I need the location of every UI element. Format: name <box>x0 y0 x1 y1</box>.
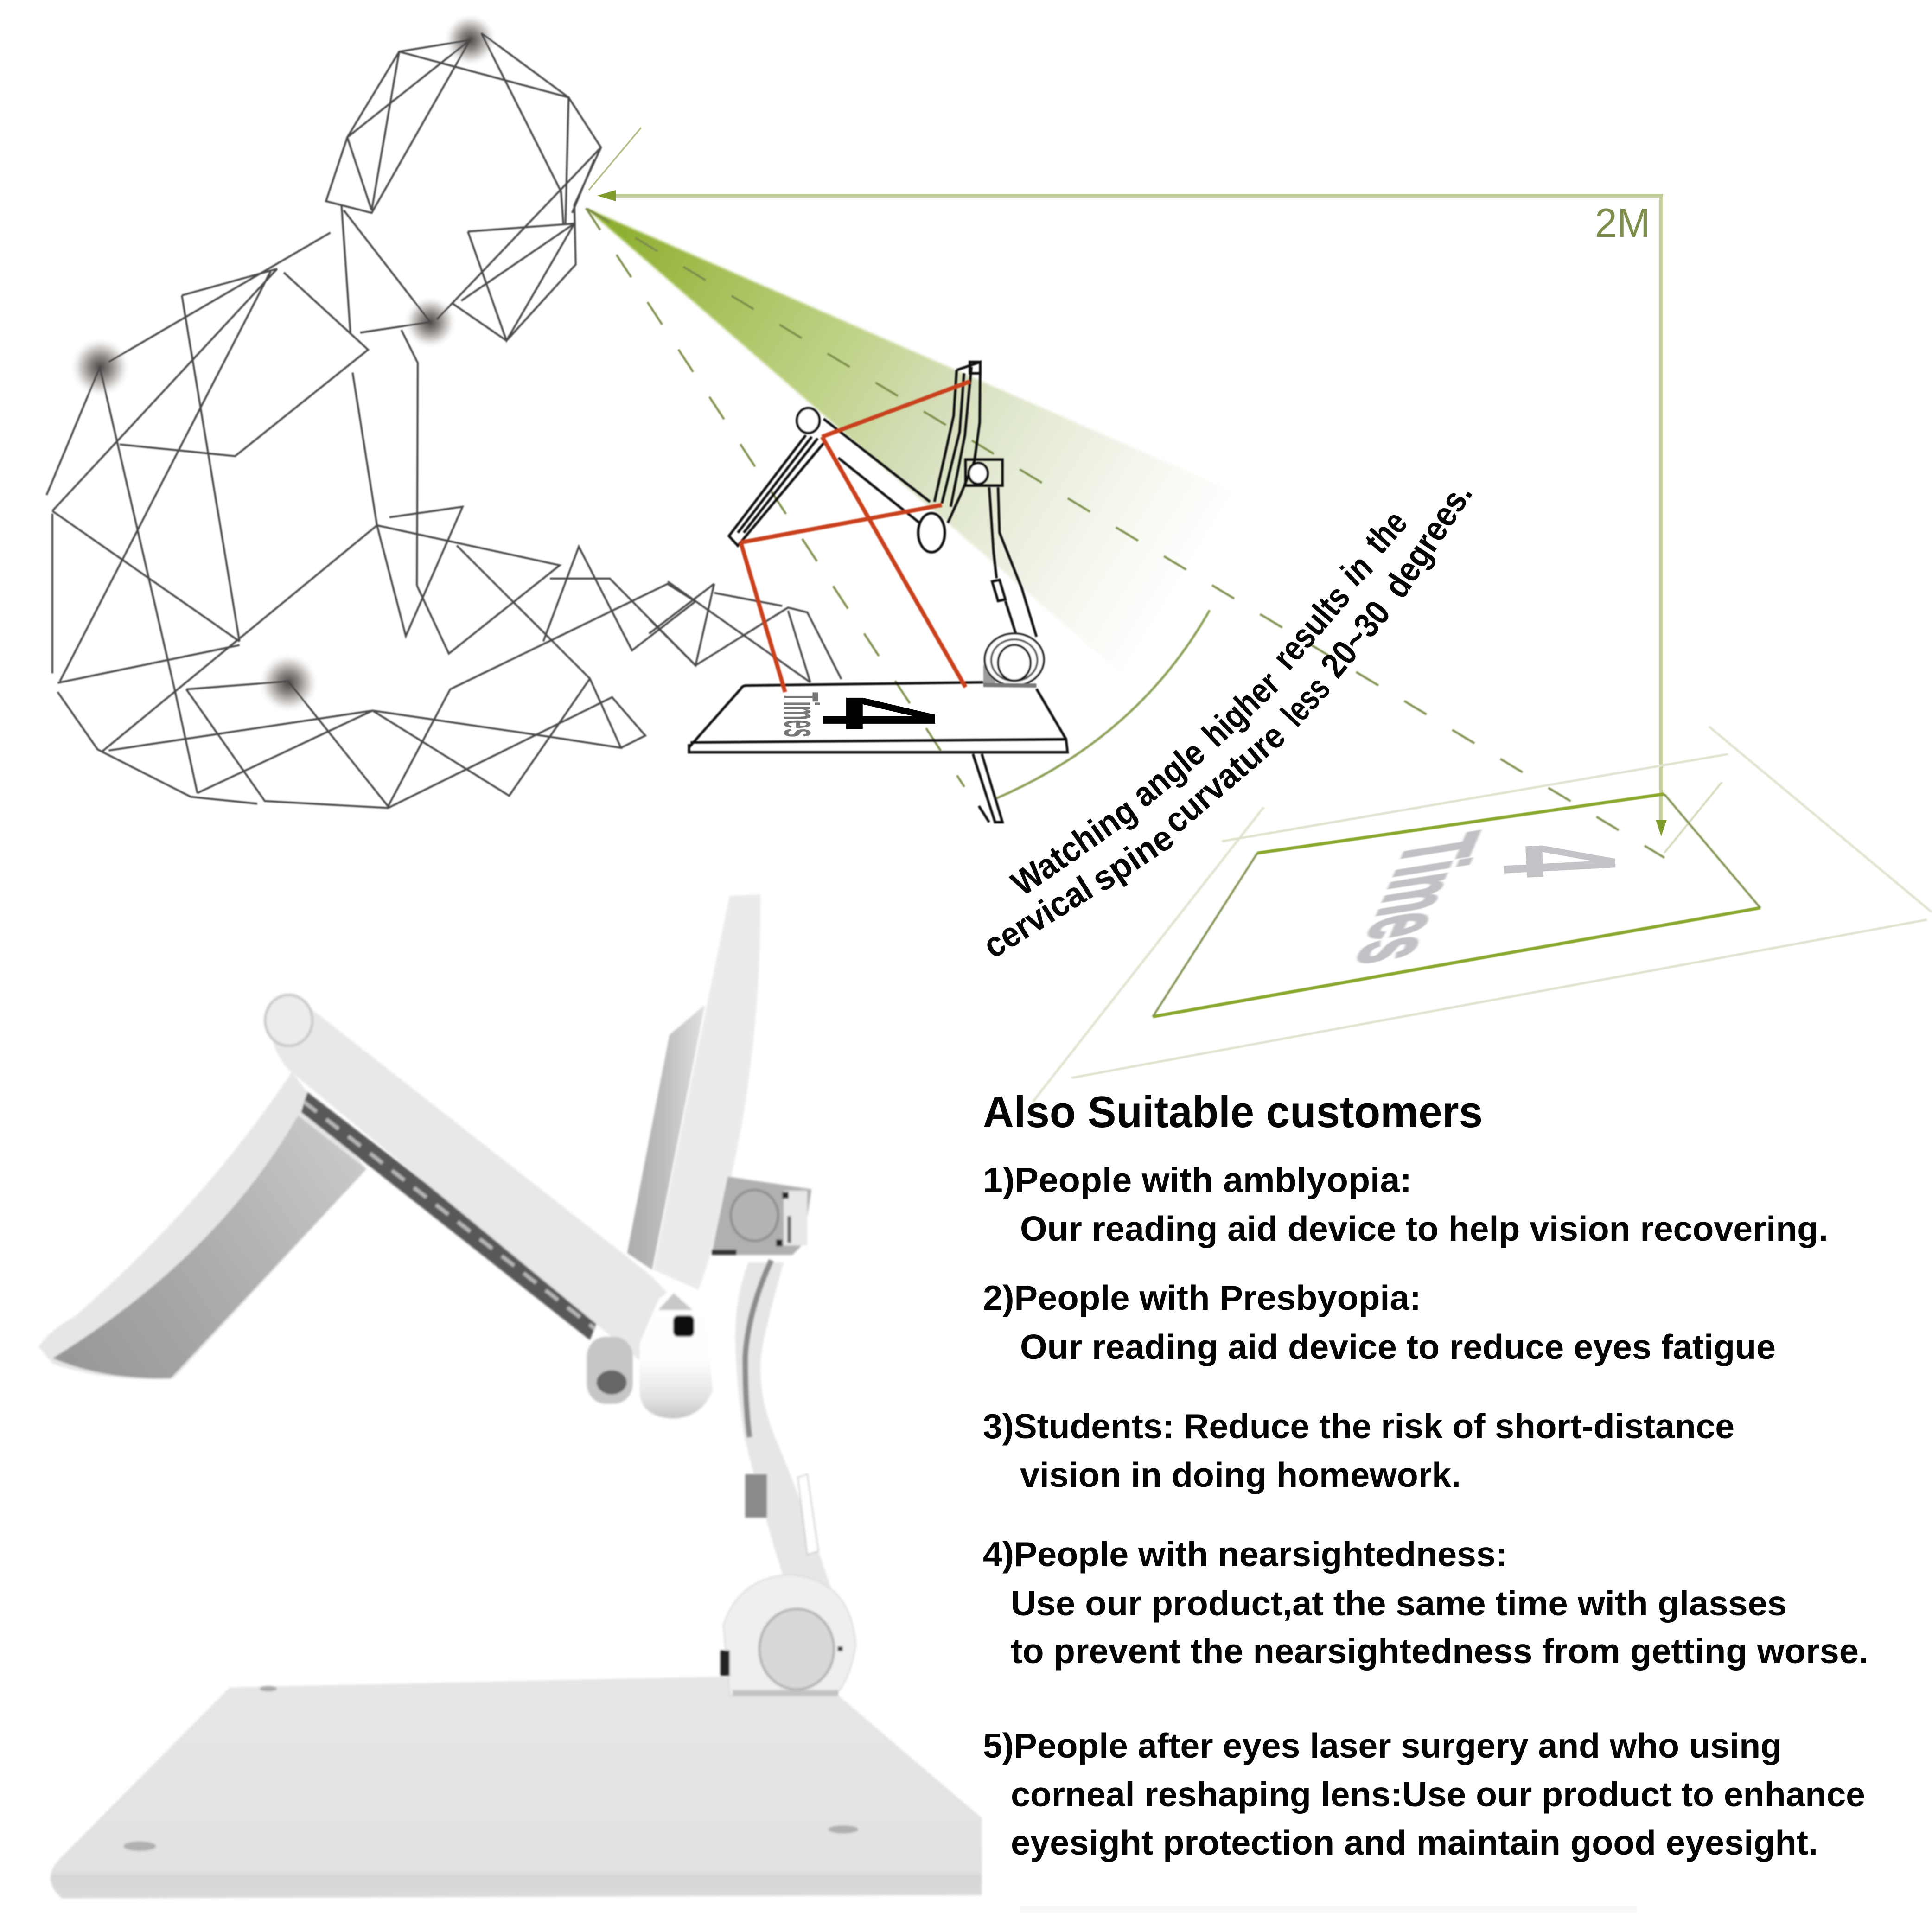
green viewing cone <box>586 208 1233 675</box>
item 1: Our reading aid device to help vision recovering. <box>1020 1209 1828 1248</box>
item 5: 5)People after eyes laser surgery and who using <box>983 1726 1782 1765</box>
item 5: eyesight protection and maintain good eyesight. <box>1011 1823 1818 1862</box>
curved caption line one: results <box>1265 578 1358 677</box>
rear leg scoop <box>38 1072 366 1379</box>
label 2M: 2M <box>1595 200 1650 246</box>
curved caption line two: 20~30 <box>1313 593 1398 685</box>
curved caption line one: Watching <box>1004 791 1143 904</box>
curved caption line one: higher <box>1195 663 1288 754</box>
base plate <box>689 682 1067 752</box>
item 2: Our reading aid device to reduce eyes fatigue <box>1020 1327 1776 1366</box>
curved caption line two: less <box>1274 669 1338 733</box>
wireframe lines <box>46 33 695 808</box>
item 4: Use our product,at the same time with glasses <box>1011 1584 1787 1623</box>
text: Times <box>774 692 828 737</box>
green page outline <box>1153 794 1760 1017</box>
curved caption line one <box>1004 503 1415 904</box>
item 5: corneal reshaping lens:Use our product to enhance <box>1011 1775 1865 1814</box>
eye pointer line <box>589 128 641 190</box>
curved caption line two: degrees. <box>1376 475 1480 605</box>
item 3: vision in doing homework. <box>1020 1455 1461 1494</box>
faint outer perspective frame <box>1033 727 1932 1102</box>
curved caption line one: in <box>1334 547 1380 593</box>
red sight triangle lines <box>741 382 970 692</box>
curved caption line two: curvature <box>1156 716 1293 841</box>
screen front <box>653 894 761 1290</box>
curved neck <box>735 1260 832 1592</box>
hinge at base <box>983 633 1044 686</box>
item 4 <box>983 1535 1868 1671</box>
curved caption line two: spine <box>1084 817 1180 899</box>
neck column <box>989 487 1037 637</box>
2M dimension line with arrows <box>597 190 1667 836</box>
curved caption line one: angle <box>1125 733 1212 815</box>
curved caption line two <box>976 475 1480 966</box>
item 1 <box>983 1160 1828 1248</box>
rear of screen <box>627 1005 705 1270</box>
wireframe legs near the device <box>649 581 842 682</box>
wireframe seated person <box>46 13 842 808</box>
arm and joint circles <box>797 408 945 552</box>
item 2: 2)People with Presbyopia: <box>983 1278 1421 1317</box>
item 2 <box>983 1278 1776 1366</box>
mount box <box>965 459 1002 485</box>
enlarged page on far plane <box>1033 727 1932 1102</box>
product photo: reading stand <box>38 894 982 1899</box>
heading: Also Suitable customers <box>983 1087 1483 1137</box>
viewing angle arc <box>996 610 1210 798</box>
item 3: 3)Students: Reduce the risk of short-distance <box>983 1407 1734 1446</box>
item 4: to prevent the nearsightedness from getting worse. <box>1011 1632 1868 1671</box>
head blur joint spots <box>70 13 497 714</box>
rack under arm <box>301 1092 599 1340</box>
item 4: 4)People with nearsightedness: <box>983 1535 1507 1574</box>
base plate <box>51 1677 982 1899</box>
curved caption line one: the <box>1357 503 1415 561</box>
hinge ball with camera port <box>587 1290 713 1419</box>
rear leg <box>729 435 1002 822</box>
device line drawing <box>689 362 1067 822</box>
screen mount <box>712 1177 811 1255</box>
customers text block <box>983 1087 1868 1862</box>
dashed sight lines <box>586 208 1664 858</box>
base hub with dial <box>721 1575 856 1696</box>
black number 4 on near page: 4 <box>789 697 970 730</box>
main arm <box>265 995 674 1360</box>
curved caption line two: cervical <box>976 869 1100 966</box>
gray number 4 on far page: 4 <box>1468 839 1651 881</box>
item 1: 1)People with amblyopia: <box>983 1160 1412 1199</box>
item 5 <box>983 1726 1865 1862</box>
item 3 <box>983 1407 1734 1494</box>
monitor panel <box>934 362 980 523</box>
gray word Times on far page: Times <box>1334 827 1502 970</box>
